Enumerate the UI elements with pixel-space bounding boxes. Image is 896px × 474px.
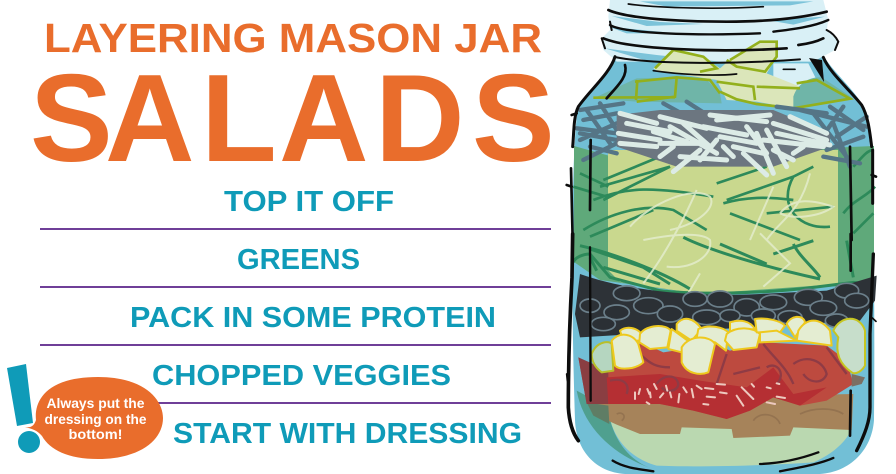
callout text: bottom! <box>68 427 122 442</box>
lid neck <box>602 0 838 93</box>
jar shoulder highlight wedge <box>809 58 824 82</box>
speech bubble <box>25 377 163 459</box>
dark side shreds <box>577 102 867 167</box>
tomato layer <box>578 342 865 419</box>
callout text: Always put the <box>46 396 145 411</box>
greens layer <box>573 146 875 302</box>
layer label: start with dressing: START WITH DRESSING <box>173 418 522 450</box>
layer label: protein: PACK IN SOME PROTEIN <box>130 302 496 334</box>
mushroom layer <box>587 394 853 438</box>
beans layer <box>575 274 877 337</box>
title line: layering mason jar: LAYERING MASON JAR <box>44 15 542 61</box>
illustration: mason jar <box>567 0 877 474</box>
cheese layer <box>577 102 867 175</box>
jar glass body <box>572 55 874 474</box>
icon: exclamation mark <box>7 364 40 453</box>
pale shreds <box>618 113 830 175</box>
dressing layer <box>577 391 852 469</box>
jar ink outlines <box>567 4 876 471</box>
callout text: dressing on the <box>44 412 147 427</box>
callout: dressing tip <box>7 364 163 459</box>
icon: embossed jar logo <box>630 173 833 302</box>
layer label: top it off: TOP IT OFF <box>224 186 394 218</box>
layer label: chopped veggies: CHOPPED VEGGIES <box>152 360 451 392</box>
corn layer <box>592 317 865 374</box>
top layer: toppings <box>593 42 853 108</box>
layer label: greens: GREENS <box>237 244 360 276</box>
title: salads: SALADS <box>30 50 555 188</box>
